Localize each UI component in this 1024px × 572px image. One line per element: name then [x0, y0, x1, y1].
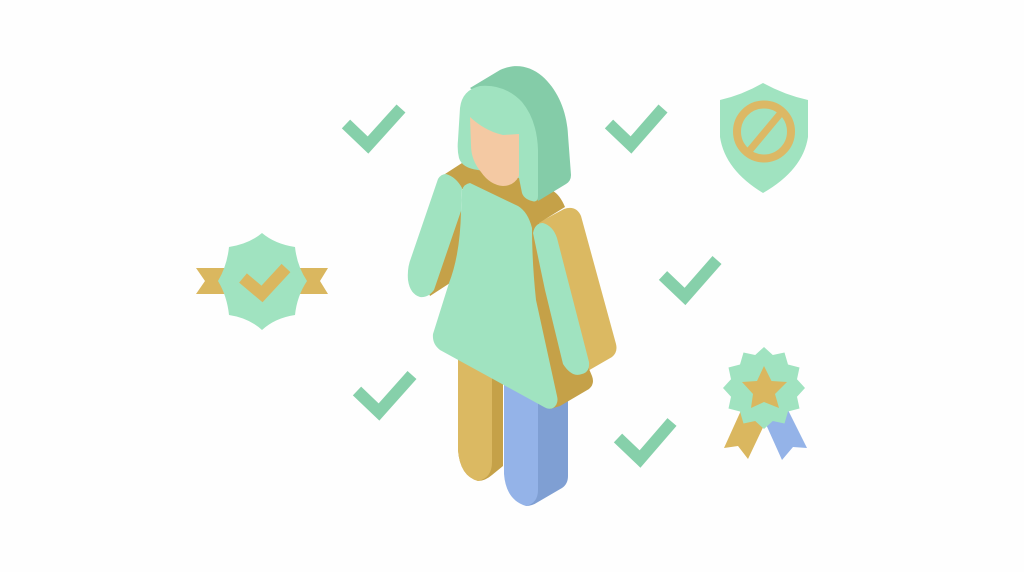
person figure	[408, 66, 616, 506]
left arm	[408, 174, 462, 297]
backpack	[538, 208, 616, 372]
icon: check mark lower right	[618, 422, 672, 459]
icon: award rosette with star	[723, 347, 807, 460]
icon: verified badge with ribbon	[196, 233, 328, 330]
torso dress	[433, 183, 558, 409]
hair front	[458, 86, 538, 201]
icon: check mark lower left	[357, 375, 412, 412]
icon: check mark top right	[609, 108, 663, 145]
icon: check mark top left	[346, 108, 401, 145]
face	[470, 117, 519, 186]
hair back	[470, 66, 571, 201]
icon: shield with prohibition sign	[720, 83, 808, 193]
right arm	[533, 223, 589, 375]
left leg	[458, 358, 503, 481]
right leg	[504, 382, 568, 506]
back of body	[420, 160, 593, 409]
icon: check mark middle right	[663, 260, 717, 296]
